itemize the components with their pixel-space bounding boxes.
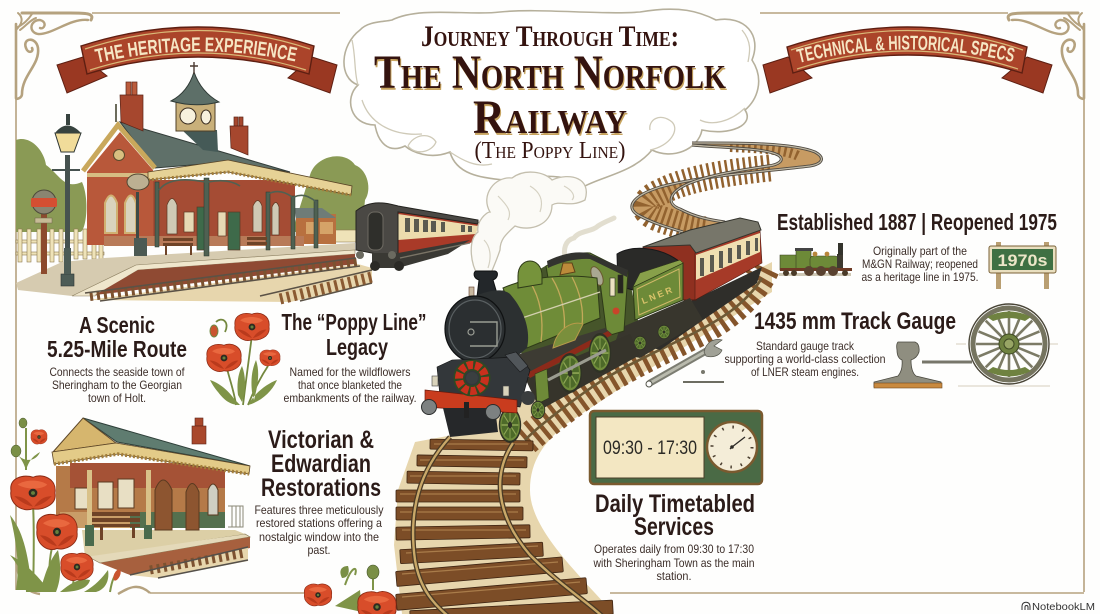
decoration: poppies lower left	[10, 418, 122, 592]
gable wall	[87, 132, 153, 245]
heading	[261, 426, 381, 502]
platform	[85, 534, 250, 563]
splasher	[553, 323, 583, 348]
station roof	[120, 122, 290, 172]
cab	[546, 252, 628, 336]
title line 3: Railway	[474, 93, 628, 146]
upper curving track	[632, 143, 821, 232]
section: track gauge	[646, 304, 1058, 388]
title line 2: The North Norfolk	[375, 48, 727, 101]
roof	[83, 418, 250, 466]
body text: Features three meticulously	[254, 503, 384, 517]
connecting rod	[548, 350, 606, 380]
body text: Operates daily from 09:30 to 17:30	[594, 542, 754, 556]
carriage	[643, 218, 762, 300]
title line 1: Journey Through Time:	[421, 20, 679, 53]
mid curve sleepers	[522, 268, 765, 444]
heading	[282, 309, 426, 360]
heading: A Scenic	[79, 312, 155, 338]
clock	[707, 422, 757, 472]
near tracks	[85, 258, 372, 302]
body text: town of Holt.	[88, 391, 146, 405]
banner: technical and historical specs: TECHNICAL & HISTORICAL SPECS	[796, 36, 1014, 62]
trees	[16, 139, 368, 232]
body text: supporting a world-class collection	[724, 352, 886, 366]
loco silhouette underlay	[500, 253, 640, 378]
dome	[518, 261, 542, 288]
body text: with Sheringham Town as the main	[593, 556, 754, 570]
heading	[595, 490, 755, 541]
icon: axle	[922, 360, 972, 364]
icon: wheel	[969, 304, 1049, 384]
bench	[92, 512, 140, 540]
icon: wrench and pen	[646, 340, 724, 387]
wheels	[499, 333, 611, 443]
decoration: poppies bottom centre	[304, 565, 396, 614]
fence	[16, 229, 357, 262]
heading: Restorations	[261, 474, 381, 502]
main wall	[153, 180, 295, 246]
illustration: heritage station scene	[16, 62, 372, 302]
illustration: background carriage	[356, 203, 478, 271]
banner: the heritage experience: THE HERITAGE EXPERIENCE	[94, 37, 298, 62]
section: scenic route	[47, 312, 187, 405]
chimneys	[120, 82, 248, 155]
subtitle: (The Poppy Line)	[474, 138, 626, 164]
body text	[593, 542, 754, 583]
safety valve	[560, 263, 575, 275]
heading: 5.25-Mile Route	[47, 336, 187, 362]
lamp post	[52, 114, 81, 286]
benches	[163, 237, 267, 255]
body text	[284, 365, 416, 405]
poppies icon	[207, 313, 280, 405]
doors and notices	[75, 479, 218, 530]
smokebox	[445, 290, 528, 362]
side shed	[294, 208, 336, 244]
body text: that once blanketed the	[298, 378, 402, 392]
body text: as a heritage line in 1975.	[862, 270, 978, 284]
platform lamp	[127, 174, 149, 256]
icon: small locomotive	[779, 243, 852, 276]
platform brick	[95, 254, 355, 295]
chimney	[469, 271, 498, 297]
body text: M&GN Railway; reopened	[862, 257, 978, 271]
tender: LNER	[640, 284, 676, 306]
body text: past.	[308, 543, 330, 557]
body text	[50, 365, 185, 405]
body text: Connects the seaside town of	[50, 365, 185, 379]
body text: Sheringham to the Georgian	[52, 378, 182, 392]
time display: 09:30 - 17:30	[603, 438, 697, 459]
body text	[724, 339, 886, 379]
chimney	[192, 418, 206, 444]
canopy	[148, 160, 352, 195]
heading: Legacy	[326, 334, 388, 360]
heading: The “Poppy Line”	[282, 309, 426, 335]
title line 2: The North Norfolk	[374, 46, 726, 99]
canopy	[52, 443, 250, 474]
illustration: steam locomotive and carriage	[422, 172, 762, 443]
lower body	[437, 357, 530, 407]
body text	[254, 503, 384, 557]
cloud with title	[344, 9, 759, 186]
sign: 1970s: 1970s	[998, 251, 1048, 270]
body text: station.	[656, 569, 692, 583]
foreground rails	[413, 437, 602, 614]
body text: of LNER steam engines.	[751, 365, 859, 379]
section: victorian restorations text	[254, 426, 384, 557]
tender	[612, 260, 703, 358]
time display	[596, 417, 704, 478]
section: established and reopened	[777, 209, 1057, 289]
frame	[525, 334, 640, 410]
section: daily timetabled services	[590, 411, 762, 583]
heading: 1435 mm Track Gauge	[754, 308, 956, 335]
gable windows	[105, 196, 136, 233]
body text	[862, 244, 978, 284]
watermark: NotebookLM	[1032, 602, 1095, 613]
whistle steam	[564, 218, 614, 262]
ballast	[394, 262, 772, 614]
boiler	[503, 261, 600, 348]
running plate	[510, 328, 612, 375]
canopy posts	[155, 178, 318, 256]
heading: Victorian &	[268, 426, 374, 454]
body text: restored stations offering a	[256, 516, 382, 530]
section: poppy line legacy	[207, 309, 426, 405]
illustration: small station	[52, 418, 250, 578]
railway track	[394, 143, 821, 614]
platform surface	[16, 243, 355, 296]
heading	[47, 312, 187, 362]
posts	[85, 470, 152, 546]
foreground sleepers	[396, 439, 613, 614]
banner: the heritage experience	[56, 26, 338, 94]
track	[130, 547, 248, 578]
heading: Services	[634, 513, 714, 541]
carriage undercarriage	[625, 267, 762, 350]
steam from chimney	[471, 172, 586, 276]
body text: embankments of the railway.	[284, 391, 416, 405]
heading: Edwardian	[271, 450, 371, 478]
body text: Originally part of the	[873, 244, 967, 258]
timetable board	[590, 411, 762, 484]
title line 3: Railway	[473, 91, 627, 144]
body text: Standard gauge track	[756, 339, 855, 353]
station sign	[31, 190, 57, 274]
icon: rail section	[874, 342, 942, 388]
wall	[56, 466, 225, 528]
banner: technical and historical specs	[762, 26, 1053, 94]
poppy wreath	[459, 365, 485, 391]
buffer beam	[422, 376, 517, 437]
body text: Named for the wildflowers	[290, 365, 410, 379]
railing	[228, 506, 243, 527]
heading: Daily Timetabled	[595, 490, 755, 518]
doors and windows	[167, 198, 279, 250]
body text: nostalgic window into the	[259, 530, 379, 544]
coal	[617, 248, 680, 290]
sign: 1970s	[989, 242, 1056, 289]
clock tower	[171, 62, 219, 152]
